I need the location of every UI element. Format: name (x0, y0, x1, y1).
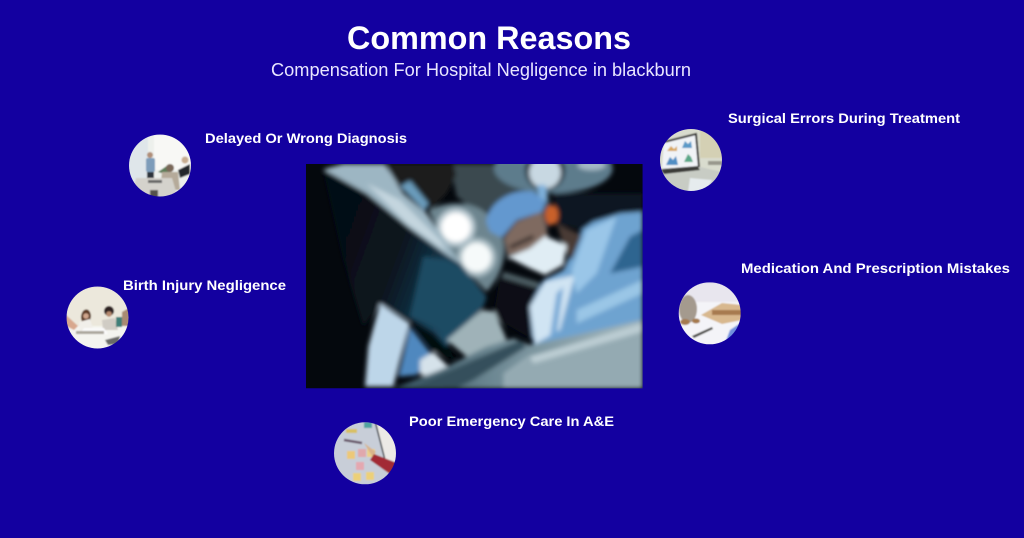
label: Birth Injury Negligence (123, 277, 286, 293)
far surgeon head (387, 164, 456, 208)
icon: sticky notes board photo circle (333, 421, 397, 485)
near surgeon back (323, 170, 487, 347)
icon: laptop with charts photo circle (659, 128, 724, 192)
subtitle: Compensation For Hospital Negligence in blackburn (271, 60, 691, 80)
right surgeon gown (529, 212, 643, 345)
bottom drapes (393, 320, 643, 388)
central photo: surgeons in operating theatre (306, 143, 643, 388)
face (504, 212, 548, 255)
icon: coins and paperwork photo circle (678, 282, 742, 346)
item: Medication And Prescription Mistakes (678, 260, 1010, 346)
item: Surgical Errors During Treatment (659, 110, 960, 192)
item: Delayed Or Wrong Diagnosis (128, 130, 407, 198)
icon: two women at laptop photo circle (66, 286, 130, 350)
label: Surgical Errors During Treatment (728, 110, 960, 126)
label: Delayed Or Wrong Diagnosis (205, 130, 407, 146)
hair (545, 205, 558, 225)
neck (557, 223, 582, 260)
cap (486, 191, 546, 237)
icon: office meeting photo circle (128, 134, 194, 198)
mask (508, 236, 567, 275)
lower arm gown (365, 303, 410, 387)
title: Common Reasons (347, 20, 631, 56)
label: Medication And Prescription Mistakes (741, 260, 1010, 276)
ceiling (450, 164, 553, 220)
top lamp (491, 164, 616, 198)
big lamp (428, 203, 504, 292)
item: Birth Injury Negligence (66, 277, 286, 350)
item: Poor Emergency Care In A&E (333, 413, 614, 485)
label: Poor Emergency Care In A&E (409, 413, 614, 429)
